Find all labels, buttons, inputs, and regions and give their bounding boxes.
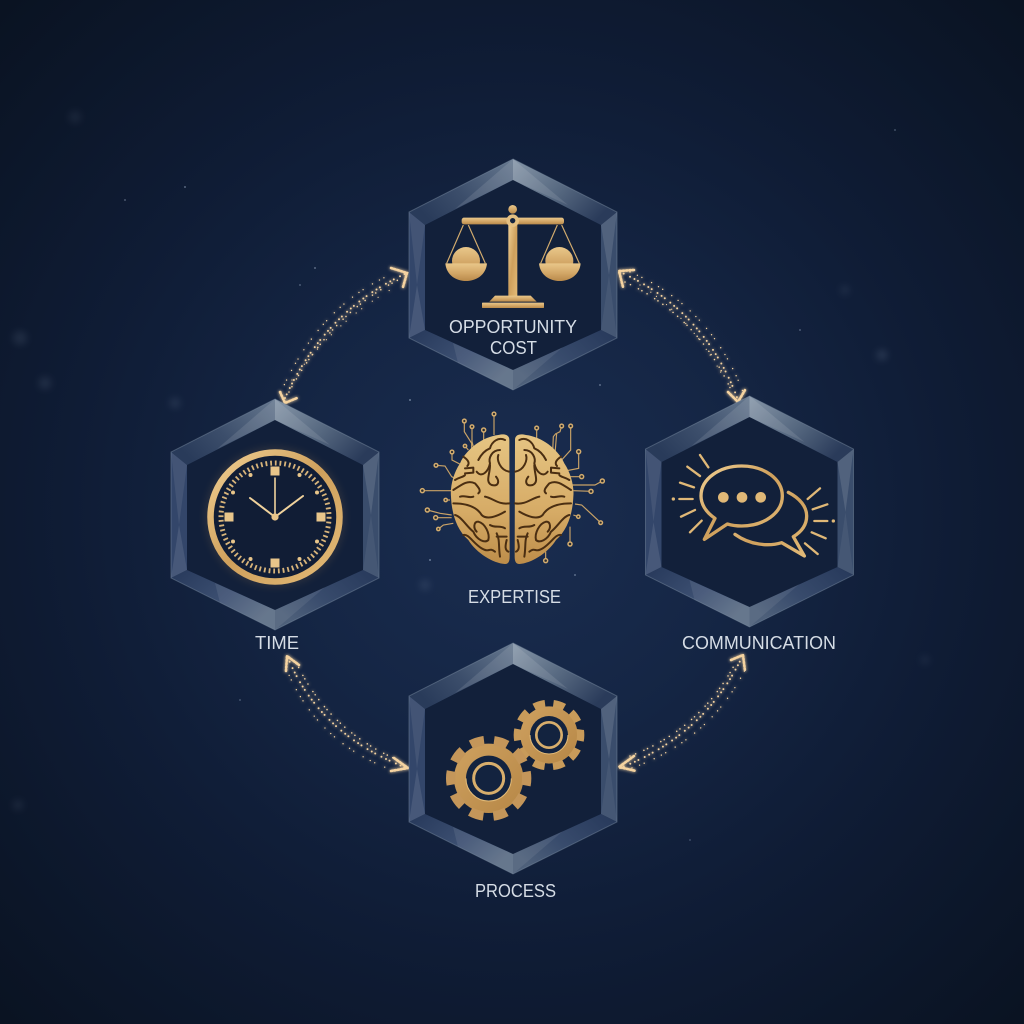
hexagon frame: time <box>171 399 379 630</box>
hexagon frame: process <box>409 643 617 874</box>
label: communication: COMMUNICATION <box>682 633 836 653</box>
large gear <box>445 734 533 822</box>
label: process: PROCESS <box>475 881 556 901</box>
arrow: opportunity cost to communication <box>619 270 745 402</box>
arrow: communication to process <box>619 655 746 771</box>
panel: process <box>409 643 617 901</box>
background particles <box>13 111 929 841</box>
label: opportunity cost: OPPORTUNITY <box>449 317 577 337</box>
panel: time <box>171 399 379 653</box>
panel: expertise <box>420 412 604 607</box>
left hemisphere <box>451 434 510 564</box>
icon: speech bubbles <box>672 455 835 556</box>
icon: balance scale <box>445 205 581 308</box>
panel: opportunity cost <box>409 159 617 390</box>
circuit traces <box>422 414 602 561</box>
hexagon frame: opportunity cost <box>409 159 617 390</box>
hexagon frame: communication <box>646 396 854 627</box>
label: opportunity cost: COST <box>490 338 537 358</box>
small gear <box>512 698 586 772</box>
arrow: process to time <box>286 656 408 771</box>
label: time: TIME <box>255 633 299 653</box>
label: opportunity cost <box>449 317 577 358</box>
icon: clock <box>205 447 345 587</box>
arrow: opportunity cost to time <box>280 268 407 403</box>
right hemisphere <box>515 434 574 564</box>
circuit nodes <box>420 412 604 563</box>
panel: communication <box>646 396 854 653</box>
icon: gears <box>445 698 586 822</box>
label: expertise: EXPERTISE <box>468 587 561 607</box>
icon: circuit brain <box>420 412 604 564</box>
